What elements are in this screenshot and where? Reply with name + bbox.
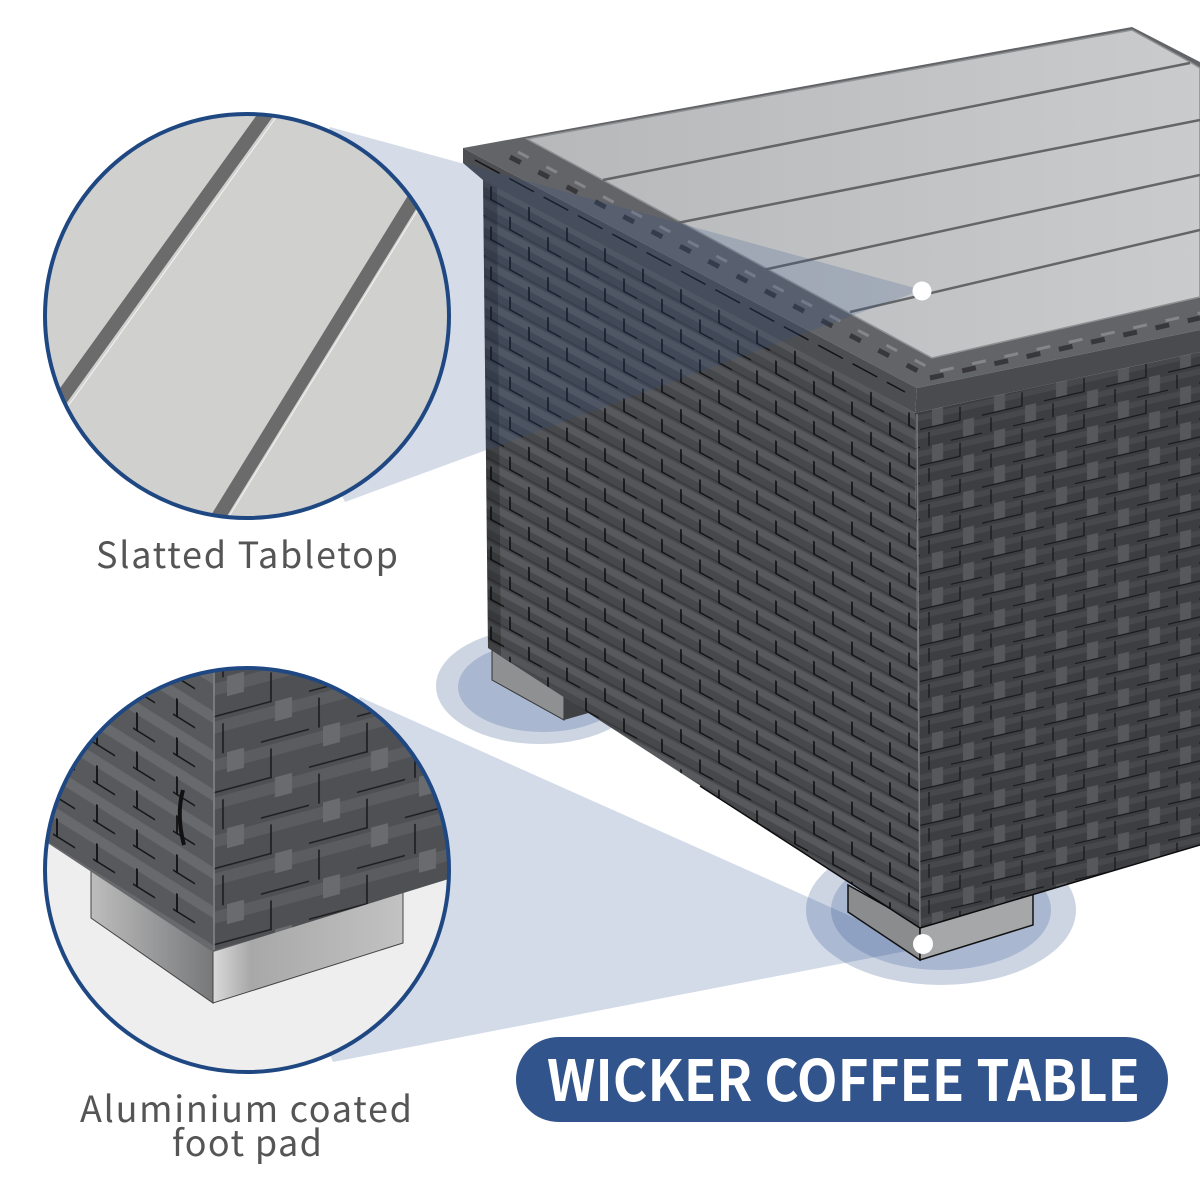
wicker coffee table	[463, 27, 1200, 960]
left foot	[492, 648, 592, 720]
right foot	[848, 885, 1033, 960]
heading: Aluminium coated foot pad: foot pad	[172, 1115, 322, 1167]
rim	[463, 27, 1200, 413]
heading: Aluminium coated foot pad: Aluminium coated	[80, 1081, 412, 1133]
title pill: WICKER COFFEE TABLE: WICKER COFFEE TABLE	[547, 1036, 1140, 1118]
detail circle: foot pad close-up	[40, 660, 455, 1072]
callout beam: aluminium foot pad	[250, 697, 922, 1062]
heading: Slatted Tabletop: Slatted Tabletop	[96, 527, 398, 579]
wicker right face	[915, 352, 1200, 928]
slatted tabletop	[527, 30, 1200, 358]
callout beam: slatted tabletop	[250, 127, 922, 502]
marker dot: foot pad	[913, 934, 933, 954]
heading: Aluminium coated foot pad	[80, 1081, 412, 1167]
detail circle: slatted tabletop	[45, 92, 449, 544]
wicker left face	[483, 178, 920, 928]
foot highlight rings: left foot	[436, 628, 644, 744]
marker dot: tabletop	[912, 282, 932, 300]
foot highlight rings: right foot	[806, 835, 1076, 985]
corner seam	[917, 414, 920, 928]
